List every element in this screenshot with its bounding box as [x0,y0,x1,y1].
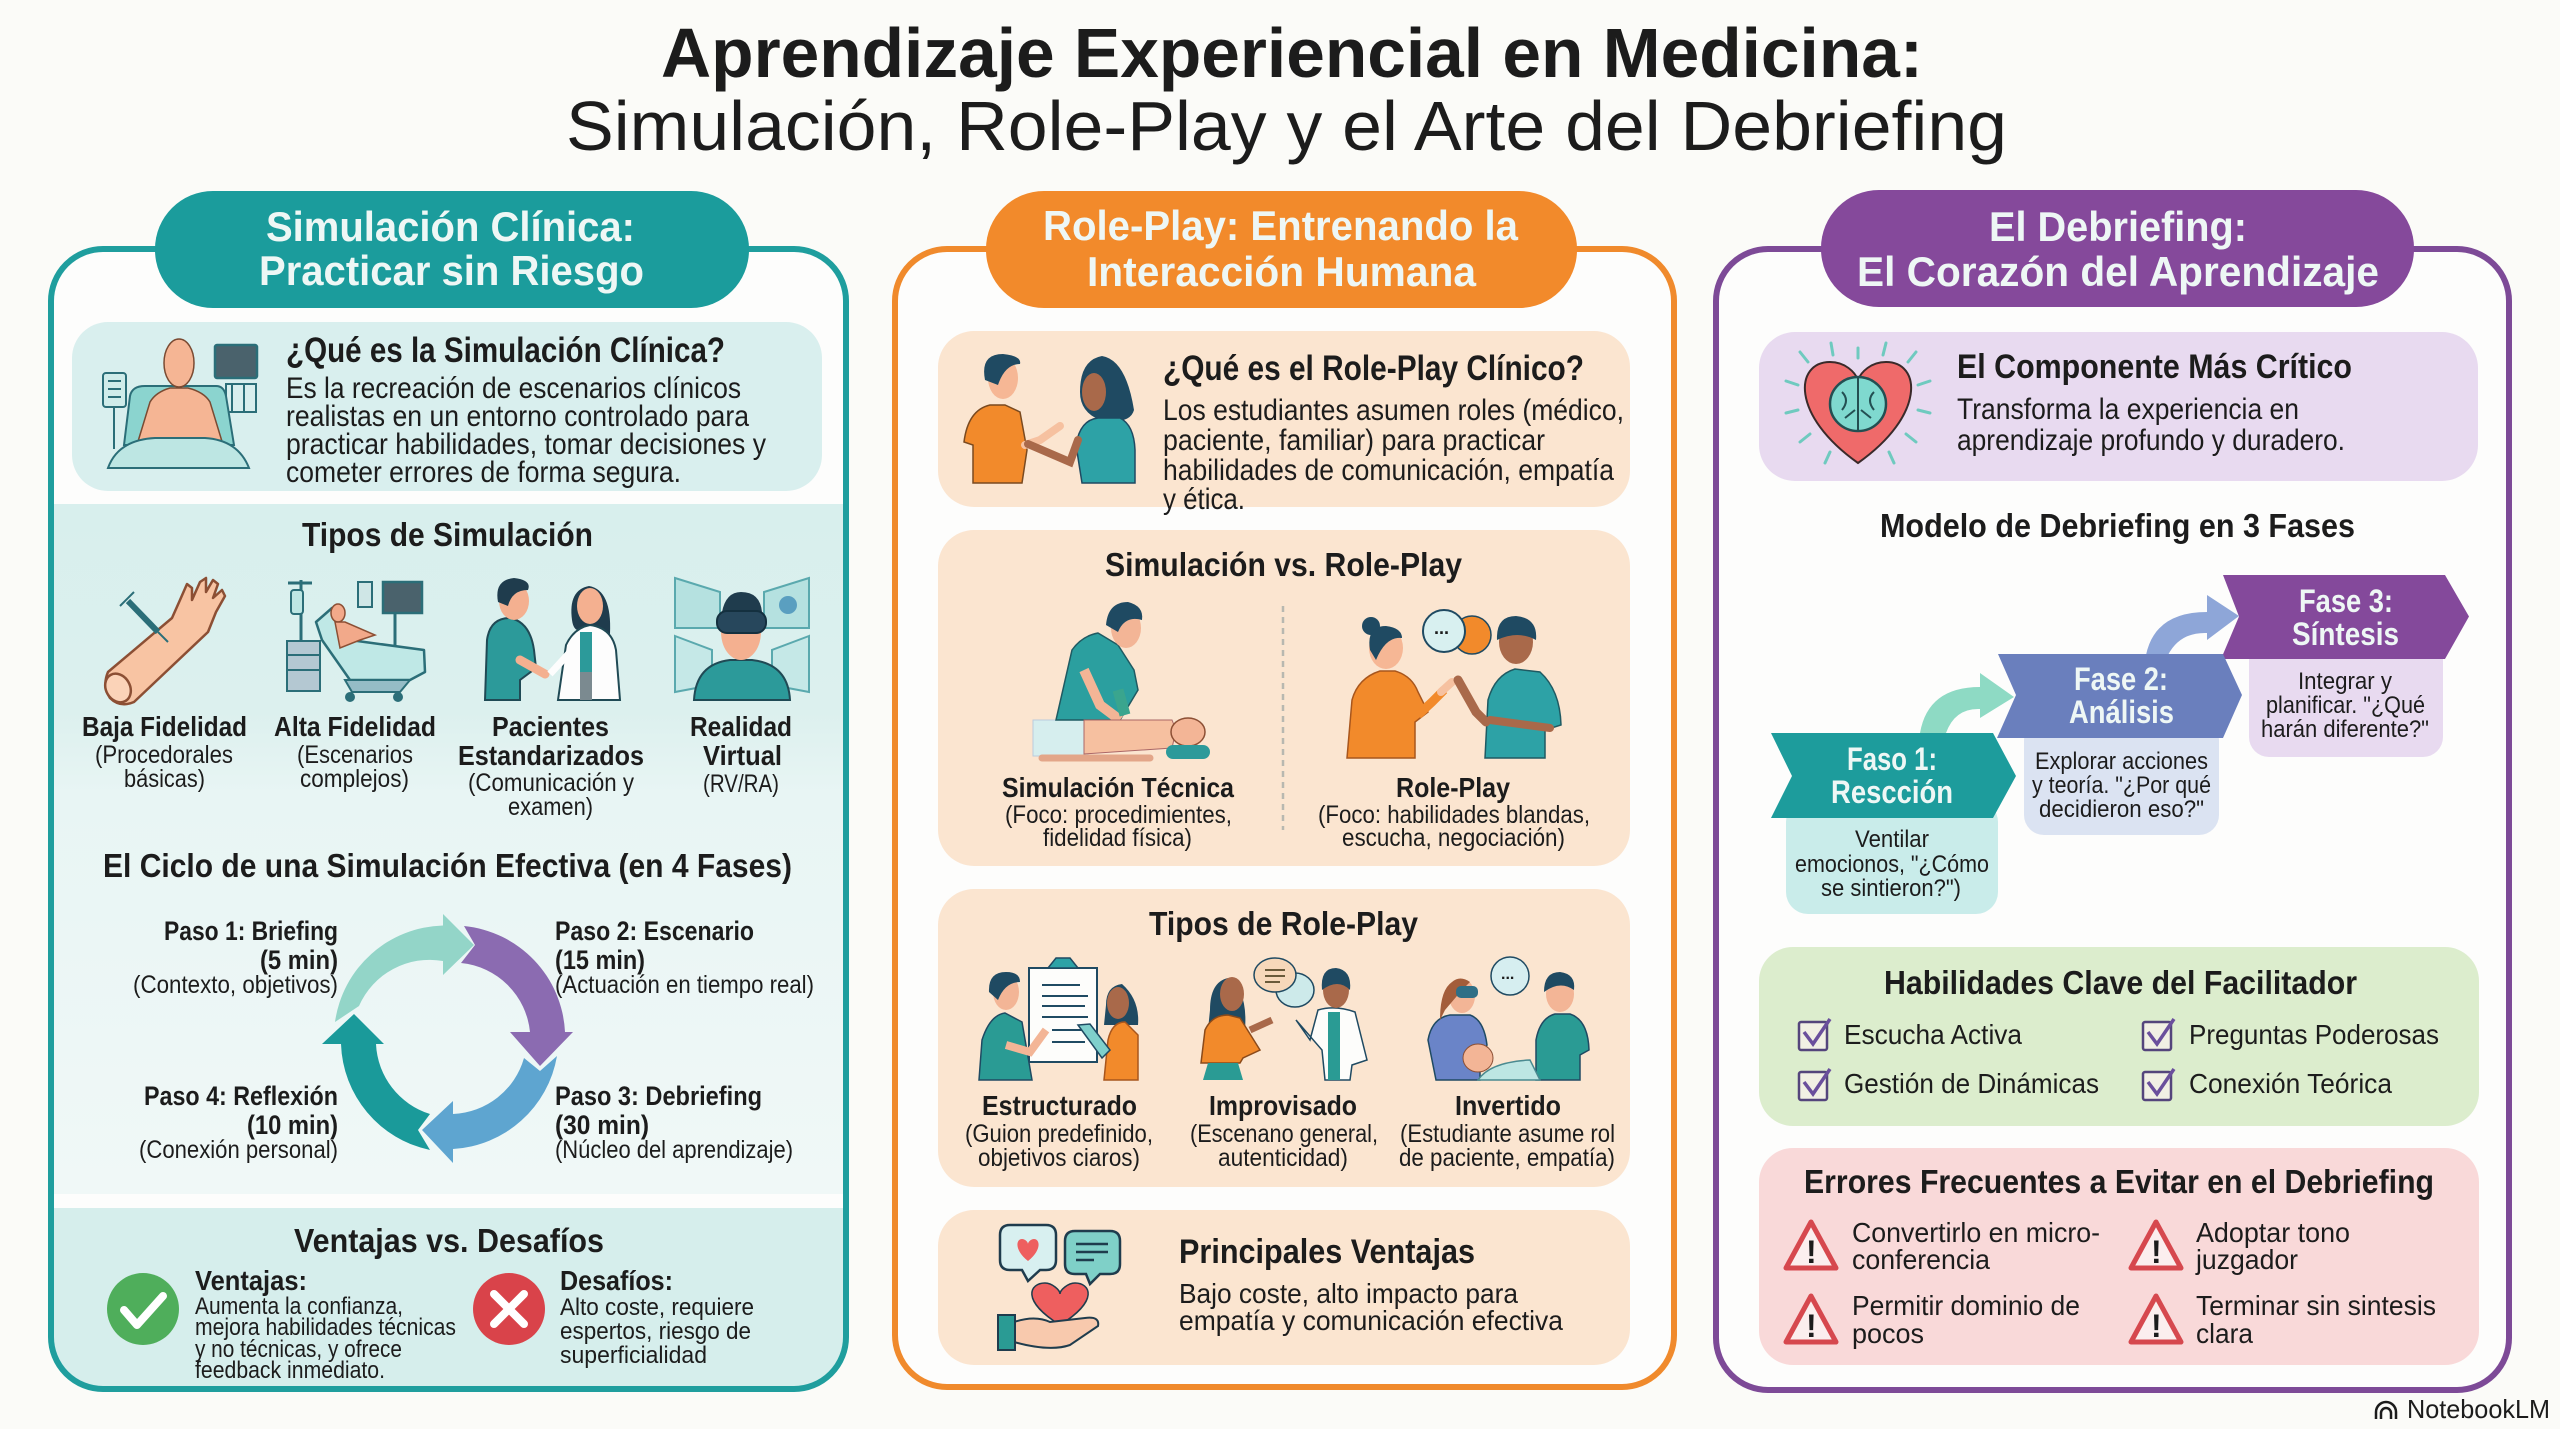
labels: tipos de role-play: (Escenano general, [1190,1120,1378,1148]
icon: red cross [473,1273,545,1345]
labels: tipos de simulación: examen) [508,793,593,821]
card: errores frecuentes [1759,1148,2479,1365]
text: paso 2: Paso 2: Escenario [555,916,754,946]
labels: tipos de simulación: (RV/RA) [703,770,779,798]
list: errores: Terminar sin sintesis [2196,1290,2436,1321]
list: errores [1852,1217,2436,1349]
text: definition: cometer errores de forma segura. [286,456,681,489]
labels: tipos de role-play: Improvisado [1209,1090,1357,1121]
arrow: paso 1 [335,914,474,1022]
heading pill: simulación clínica: Practicar sin Riesgo [259,247,644,294]
text: paso 3: Paso 3: Debriefing [555,1081,762,1111]
card: simulación vs role-play: Simulación vs. Role-Play [1105,546,1463,583]
phase: fase 1: Rescción [1831,774,1953,810]
text: principales ventajas: Principales Ventajas [1179,1233,1475,1271]
text: ventajas [195,1265,456,1384]
text: principales ventajas: empatía y comunicación efectiva [1179,1305,1563,1336]
phase: fase 2: decidieron eso?" [2039,796,2204,823]
text: paso 1: (Contexto, objetivos) [133,971,338,999]
labels: tipos de simulación: (Escenarios [297,741,413,769]
labels: tipos de role-play: (Estudiante asume rol [1400,1120,1615,1148]
text: paso 1 [133,916,338,999]
list: facilitator skills [1844,1019,2439,1099]
card: qué es la simulación clínica [72,322,822,491]
heading: modelo de debriefing: Modelo de Debriefing en 3 Fases [1880,507,2355,544]
phase: fase 1: Ventilar [1855,826,1929,853]
labels: tipos de simulación: (Procedorales [95,741,233,769]
text: paso 4 [139,1081,338,1164]
card: tipos de role-play: Tipos de Role-Play [1149,905,1419,942]
phase: fase 3: Integrar y [2298,668,2392,695]
list: facilitator skills: Conexión Teórica [2189,1068,2392,1099]
phase: fase 2: Fase 2: [2074,661,2168,697]
diagram: three phase staircase [1771,575,2469,914]
list: errores: conferencia [1852,1244,1990,1275]
labels: tipos de simulación: complejos) [300,765,409,793]
text: paso 4: (10 min) [247,1110,338,1140]
icon: standardized patient handshake [485,578,620,700]
icon: hand holding heart and speech bubbles [998,1225,1120,1350]
arrow: paso 3 [422,1056,557,1163]
text: role-play definition: ¿Qué es el Role-Play Clínico? [1163,349,1584,388]
panel: debriefing [1716,190,2509,1390]
text: desafíos: superficialidad [560,1342,707,1369]
phase: fase 2: y teoría. "¿Por qué [2032,772,2211,799]
heading pill: simulación clínica: Simulación Clínica: [266,203,635,250]
text: desafíos: Alto coste, requiere [560,1294,754,1321]
heading: ventajas vs desafíos: Ventajas vs. Desafíos [294,1222,604,1259]
text: ventajas: Aumenta la confianza, [195,1293,403,1320]
labels: tipos de simulación: Realidad [690,711,792,742]
text: componente crítico: Transforma la experiencia en [1957,393,2299,426]
phase: fase 3: planificar. "¿Qué [2266,692,2425,719]
heading pill: simulación clínica [155,191,749,308]
card: habilidades clave [1759,947,2479,1126]
text: simulación técnica: (Foco: procedimientes, [1005,801,1232,829]
text: desafíos [560,1265,754,1369]
arrow: paso 4 [322,1014,430,1150]
icon: heart with brain [1786,343,1930,463]
heading pill: role-play: Role-Play: Entrenando la [1043,202,1519,249]
text: desafíos: Desafíos: [560,1265,673,1296]
icon: inverted patient role: ... [1501,966,1514,983]
phase: fase 1 [1771,733,2016,914]
labels: tipos de role-play: objetivos ciaros) [978,1144,1140,1172]
title: Aprendizaje Experiencial en Medicina: [661,14,1923,92]
icons: warning triangles: ! [2151,1234,2162,1270]
panel: role-play [895,191,1674,1387]
list: errores: Convertirlo en micro- [1852,1217,2100,1248]
icons: check boxes [1799,1019,2174,1100]
list: facilitator skills: Gestión de Dinámicas [1844,1068,2099,1099]
text: componente crítico: El Componente Más Crítico [1957,348,2352,386]
labels: tipos de simulación: básicas) [124,765,205,793]
labels: tipos de simulación: Estandarizados [458,740,644,771]
text: definition: realistas en un entorno controlado para [286,400,749,433]
list: errores: Adoptar tono [2196,1217,2350,1248]
icon: patient in bed with monitor [103,339,257,468]
text: paso 3: (30 min) [555,1110,649,1140]
heading pill: debriefing: El Corazón del Aprendizaje [1857,248,2379,295]
phase: fase 2: Explorar acciones [2035,748,2208,775]
labels: tipos de role-play: autenticidad) [1218,1144,1348,1172]
phase: fase 2: Análisis [2069,694,2174,730]
text: desafíos: espertos, riesgo de [560,1318,751,1345]
labels: tipos de role-play [965,1090,1615,1172]
text: role-play definition: paciente, familiar) para practicar [1163,424,1545,457]
list: facilitator skills: Escucha Activa [1844,1019,2022,1050]
heading pill: role-play [986,191,1577,308]
labels: tipos de simulación: Virtual [703,740,782,771]
phase: fase 3: Fase 3: [2299,583,2393,619]
text: principales ventajas [1179,1233,1563,1336]
labels: tipos de simulación: Pacientes [492,711,609,742]
icon: arm and syringe [100,578,225,707]
text: definition: Es la recreación de escenarios clínicos [286,372,741,405]
icons: warning triangles: ! [2151,1308,2162,1344]
icon: technical simulation cpr [1033,602,1210,759]
phase: fase 2 [1997,654,2242,835]
card: qué es el role-play clínico [938,331,1630,516]
icon: structured script clipboard [979,958,1138,1080]
heading: ciclo de simulación: El Ciclo de una Simulación Efectiva (en 4 Fases) [103,847,792,884]
card: simulación vs role-play [938,530,1630,866]
text: ventajas: y no técnicas, y ofrece [195,1336,402,1363]
icons: warning triangles [1786,1222,2181,1344]
title [566,14,2007,165]
arrow: fase 2 to fase 3 [2146,595,2239,655]
arrow: fase 1 to fase 2 [1920,673,2014,733]
list: facilitator skills: Preguntas Poderosas [2189,1019,2439,1050]
icon: high fidelity mannequin on bed [287,580,425,702]
icon: inverted patient role [1428,957,1589,1080]
card: principales ventajas [938,1210,1630,1365]
text: principales ventajas: Bajo coste, alto impacto para [1179,1278,1518,1309]
text: role-play definition [1163,349,1624,516]
text: paso 2: (Actuación en tiempo real) [555,971,814,999]
list: errores: juzgador [2195,1244,2298,1275]
text: simulación técnica: fidelidad física) [1043,824,1192,852]
text: paso 4: Paso 4: Reflexión [144,1081,338,1111]
text: role-play focus [1318,772,1590,852]
text: role-play focus: escucha, negociación) [1342,824,1565,852]
heading pill: debriefing [1821,190,2414,307]
text: simulación técnica [1002,772,1234,852]
labels: tipos de simulación [82,711,792,821]
text: paso 1: (5 min) [260,945,338,975]
icon: virtual reality headset [675,578,809,700]
text: paso 4: (Conexión personal) [139,1136,338,1164]
panel: simulación clínica [51,191,846,1389]
text: role-play definition: Los estudiantes asumen roles (médico, [1163,394,1624,427]
heading: tipos de simulación: Tipos de Simulación [302,516,593,553]
text: role-play definition: habilidades de comunicación, empatía [1163,454,1614,487]
text: componente crítico: aprendizaje profundo y duradero. [1957,424,2345,457]
icon: role-play conversation [1347,610,1561,758]
labels: tipos de simulación: Baja Fidelidad [82,711,247,742]
text: paso 2 [555,916,814,999]
labels: tipos de role-play: Invertido [1455,1090,1561,1121]
icons: warning triangles: ! [1806,1308,1817,1344]
arrow: paso 2 [461,926,573,1066]
icon: two people talking [964,354,1135,483]
chart: four phase cycle [322,914,573,1163]
labels: tipos de simulación: (Comunicación y [468,769,634,797]
card: habilidades clave: Habilidades Clave del Facilitador [1884,964,2357,1001]
text: ventajas: feedback inmediato. [195,1357,385,1384]
text: definition: practicar habilidades, tomar decisiones y [286,428,766,461]
title: Simulación, Role-Play y el Arte del Debriefing [566,87,2007,165]
heading pill: debriefing: El Debriefing: [1989,203,2247,250]
labels: tipos de simulación: Alta Fidelidad [274,711,436,742]
list: errores: pocos [1852,1318,1924,1349]
card: tipos de role-play [938,889,1630,1187]
text: role-play definition: y ética. [1163,483,1245,516]
icon: role-play conversation: ... [1434,618,1449,638]
text: simulación técnica: Simulación Técnica [1002,772,1234,803]
icons: warning triangles: ! [1806,1234,1817,1270]
phase: fase 3 [2221,575,2469,757]
labels: tipos de role-play: (Guion predefinido, [965,1120,1153,1148]
card: errores frecuentes: Errores Frecuentes a Evitar en el Debriefing [1804,1163,2434,1200]
text: role-play focus: Role-Play [1396,772,1510,803]
phase: fase 1: se sintieron?") [1821,875,1961,902]
phase: fase 3: Síntesis [2292,616,2399,652]
text: paso 3 [555,1081,793,1164]
text: role-play focus: (Foco: habilidades blandas, [1318,801,1590,829]
text: definition [286,331,766,489]
list: errores: clara [2196,1318,2253,1349]
text: definition: ¿Qué es la Simulación Clínica? [286,331,725,370]
icon: improvised conversation [1201,958,1367,1080]
text: paso 3: (Núcleo del aprendizaje) [555,1136,793,1164]
phase: fase 1: Faso 1: [1847,741,1937,777]
phase: fase 1: emocionos, "¿Cómo [1795,851,1989,878]
text: ventajas: mejora habilidades técnicas [195,1314,456,1341]
heading pill: role-play: Interacción Humana [1087,248,1477,295]
phase: fase 3: harán diferente?" [2261,716,2429,743]
icon: green check [107,1273,179,1345]
card: componente más crítico [1759,332,2478,481]
text: ventajas: Ventajas: [195,1265,307,1296]
text: paso 2: (15 min) [555,945,645,975]
text: paso 1: Paso 1: Briefing [164,916,338,946]
labels: tipos de role-play: Estructurado [982,1090,1137,1121]
labels: tipos de role-play: de paciente, empatía) [1399,1144,1615,1172]
list: errores: Permitir dominio de [1852,1290,2080,1321]
logo: NotebookLM: NotebookLM [2407,1394,2550,1424]
text: componente crítico [1957,348,2352,457]
